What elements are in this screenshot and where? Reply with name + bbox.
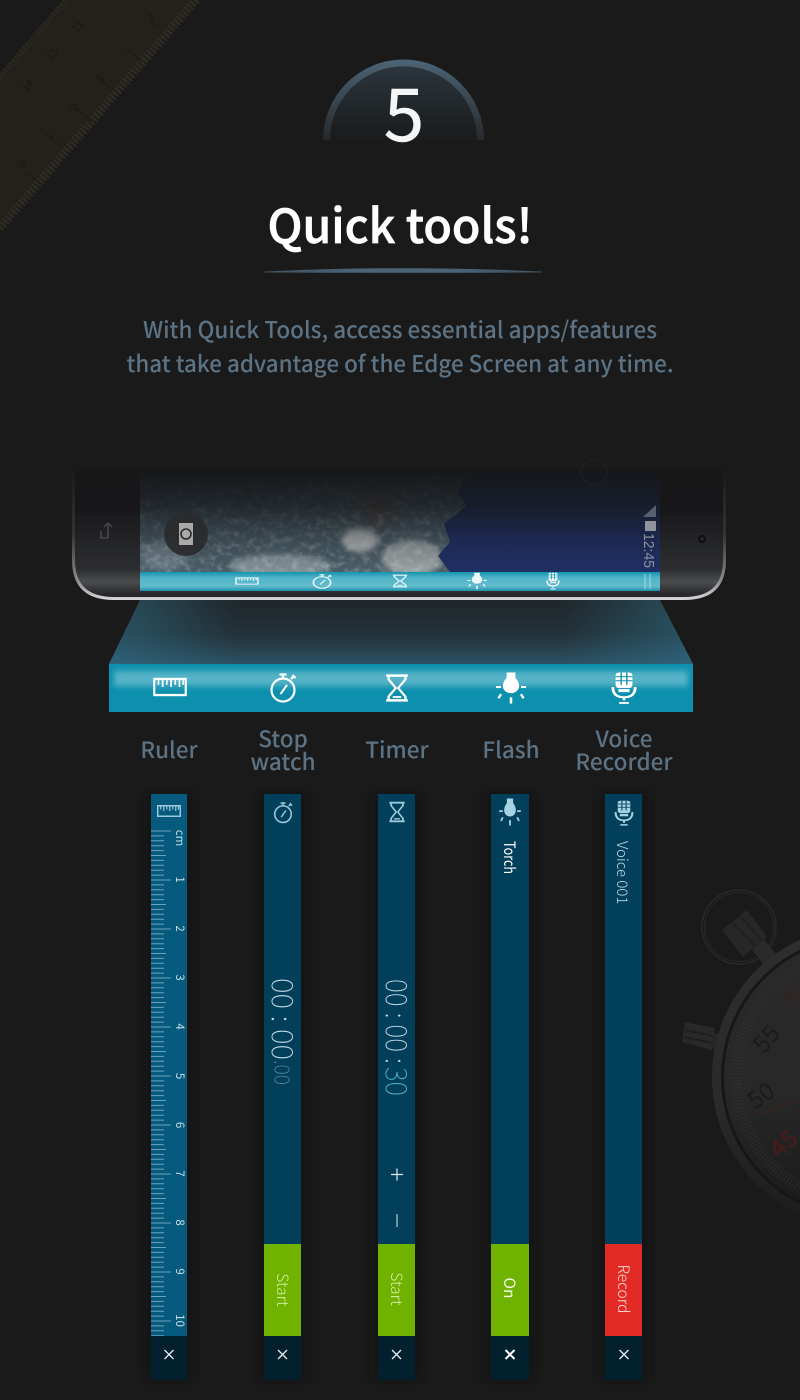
stopwatch side button: [682, 1022, 720, 1050]
decorative ruler, top left: 14: [17, 75, 37, 95]
ruler ticks: [151, 830, 187, 1336]
tool labels: Flash: [482, 733, 540, 765]
icon: voice recorder: [613, 673, 635, 703]
plus button: [391, 1168, 403, 1180]
stopwatch hundredths: .00: [269, 1060, 298, 1085]
intro text: [126, 311, 674, 379]
decorative ruler, top left: 5: [91, 70, 107, 85]
projection trapezoid: [109, 600, 693, 664]
icon: stopwatch: [272, 674, 296, 702]
close icon: [278, 1350, 287, 1359]
title underline: [264, 268, 542, 272]
number 5: 5: [384, 57, 424, 163]
stopwatch time: 00 : 00: [263, 978, 305, 1060]
panel: voice recorder: [605, 794, 642, 1380]
ruler numbers: 1: [172, 876, 188, 883]
minus button: [396, 1214, 398, 1227]
icon: timer: [389, 803, 405, 821]
decorative ruler, top left: 8: [14, 157, 30, 172]
on label: On: [499, 1278, 521, 1298]
close icon: [164, 1350, 174, 1359]
wallpaper: [140, 480, 660, 572]
start label: Start: [272, 1273, 294, 1307]
decorative ruler, top left: 1: [41, 129, 57, 144]
close icon: [506, 1350, 514, 1359]
icon: timer: [386, 676, 408, 700]
edge screen bar: [140, 572, 660, 591]
icon: voice recorder: [616, 801, 632, 825]
front camera: [698, 535, 706, 543]
ruler numbers: 9: [172, 1268, 188, 1275]
home button outline: [581, 459, 607, 485]
phone: [72, 459, 726, 600]
panel: stopwatch: [263, 794, 305, 1380]
panel: flash: [491, 794, 529, 1380]
stopwatch numerals: 55: [743, 1016, 787, 1059]
ruler numbers: 6: [172, 1122, 188, 1128]
phone rim: [72, 470, 726, 600]
stopwatch numerals: [739, 973, 800, 1164]
panel: timer: [377, 794, 419, 1380]
ruler numbers: 5: [172, 1073, 188, 1079]
number badge dome: [323, 57, 484, 163]
close icon: [392, 1350, 401, 1359]
phone body: [75, 470, 723, 597]
strip shadows: [143, 794, 650, 1380]
back icon: [101, 523, 112, 538]
icon: ruler: [158, 806, 180, 816]
timer time: 00 : 00 :: [377, 979, 419, 1064]
close icon: [620, 1350, 628, 1359]
ruler numbers: 4: [172, 1023, 188, 1030]
ruler numbers: 3: [172, 974, 188, 981]
ruler numbers: [172, 830, 188, 1327]
panel: ruler: [151, 794, 188, 1380]
decorative ruler, top left: [0, 0, 200, 232]
tool labels: Voice: [594, 722, 653, 754]
tool labels: Ruler: [140, 733, 198, 765]
decorative stopwatch, right: [682, 890, 800, 1228]
stopwatch crown: [722, 910, 778, 967]
timer seconds: 30: [377, 1067, 419, 1096]
ruler numbers: 8: [172, 1219, 188, 1226]
ruler numbers: cm: [172, 830, 188, 846]
status bar: 12:45: [640, 533, 657, 568]
icon: stopwatch: [275, 803, 292, 822]
voice file label: Voice 001: [612, 841, 633, 904]
decorative ruler, top left: 0: [65, 99, 81, 114]
stopwatch numerals: 50: [739, 1072, 781, 1116]
torch label: Torch: [499, 841, 521, 874]
start label: Start: [386, 1272, 408, 1306]
status bar: [640, 505, 657, 568]
ruler numbers: 2: [172, 925, 188, 932]
tool labels: Recorder: [575, 745, 673, 777]
ruler numbers: 7: [172, 1170, 188, 1177]
decorative ruler, top left: 15: [42, 44, 62, 64]
record label: Record: [613, 1265, 635, 1313]
camera shortcut: [164, 512, 208, 556]
intro text: With Quick Tools, access essential apps/features: [143, 311, 657, 345]
icon: flash: [496, 673, 526, 703]
icon: flash: [499, 798, 521, 826]
icon: ruler: [154, 679, 186, 695]
stopwatch body: [712, 926, 800, 1228]
quick tools band: [109, 664, 693, 712]
title: Quick tools!: [268, 188, 532, 257]
decorative ruler, top left: 4: [143, 10, 159, 25]
decorative ruler, top left: 11: [67, 16, 87, 36]
tool labels: watch: [250, 745, 316, 777]
tool labels: Timer: [365, 733, 429, 765]
tool labels: Stop: [258, 722, 308, 754]
stopwatch ring: [702, 890, 776, 964]
ruler numbers: 10: [172, 1314, 188, 1327]
tool labels: [140, 722, 673, 777]
intro text: that take advantage of the Edge Screen at any time.: [126, 345, 674, 379]
